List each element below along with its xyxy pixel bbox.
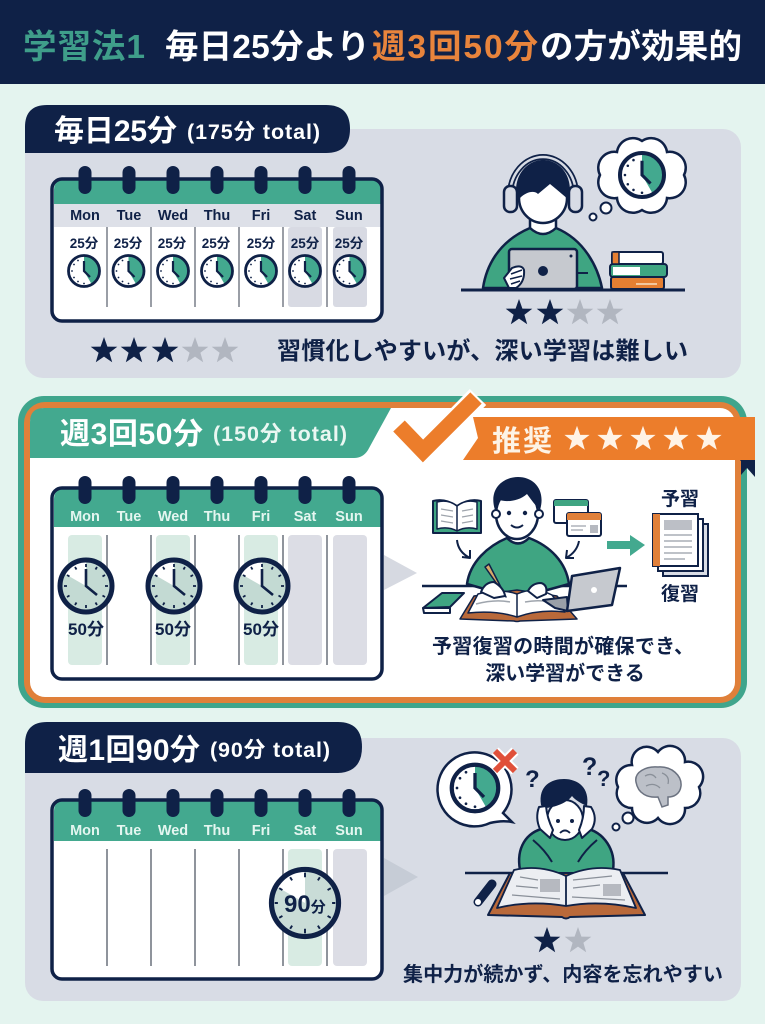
- calendar: seven days: 25分: [291, 236, 320, 251]
- heading: daily 25 minutes: (175分 total): [187, 120, 320, 144]
- badge: recommended ribbon: [463, 417, 755, 477]
- icon: question marks: ?: [525, 766, 540, 793]
- heading: once a week: (90分 total): [210, 738, 330, 762]
- calendar: seven days: Fri: [252, 208, 270, 224]
- title banner: [0, 0, 765, 84]
- illustration: student studying at desk: [422, 477, 627, 622]
- icon: thought bubble with brain: [612, 746, 703, 830]
- icon: question marks: ?: [597, 766, 610, 791]
- heading: three times a week: (150分 total): [213, 422, 347, 446]
- calendar: one long session: [52, 789, 382, 979]
- calendar: one long session: Sat: [294, 823, 316, 839]
- caption: recommended study: [432, 634, 694, 685]
- calendar: seven days: Mon: [70, 208, 100, 224]
- icon: question marks: [525, 753, 610, 793]
- caption: recommended study: 深い学習ができる: [485, 661, 645, 685]
- calendar: seven days: 25分: [114, 236, 143, 251]
- calendar: three study days: Thu: [204, 509, 230, 525]
- heading: daily 25 minutes: 毎日25分: [54, 115, 177, 148]
- calendar: three study days: 50分: [155, 620, 191, 639]
- rating: one of two stars: [534, 927, 591, 952]
- illustration: student with tablet and headphones: [461, 157, 685, 290]
- arrow: calendar to illustration: [384, 555, 417, 590]
- caption: daily study: 習慣化しやすいが、深い学習は難しい: [277, 337, 688, 365]
- calendar: one long session: Tue: [117, 823, 141, 839]
- icon: check mark: [398, 397, 478, 453]
- calendar: three study days: [52, 476, 382, 679]
- calendar: one long session: 90分: [284, 891, 326, 918]
- icon: question marks: ?: [582, 753, 597, 781]
- rating: three of five stars: [91, 337, 238, 362]
- calendar: seven days: 25分: [247, 236, 276, 251]
- calendar: three study days: Sun: [335, 509, 363, 525]
- calendar: one long session: Wed: [158, 823, 188, 839]
- icon: preview and review documents: [653, 488, 708, 605]
- calendar: three study days: 50分: [68, 620, 104, 639]
- title: main heading: の方が効果的: [540, 28, 742, 66]
- heading: daily 25 minutes: [25, 105, 350, 153]
- caption: recommended study: 予習復習の時間が確保でき、: [432, 634, 694, 658]
- title: main heading: 毎日25分より: [165, 29, 370, 66]
- icon: preview and review documents: 予習: [661, 488, 699, 510]
- icon: clock speech bubble with red cross: [438, 751, 515, 826]
- heading: once a week: 週1回90分: [58, 734, 200, 767]
- calendar: seven days: Tue: [117, 208, 141, 224]
- heading: once a week: [25, 722, 362, 773]
- calendar: seven days: [52, 166, 382, 321]
- calendar: three study days: Sat: [294, 509, 316, 525]
- heading: three times a week: [30, 408, 391, 458]
- calendar: seven days: Thu: [204, 208, 230, 224]
- calendar: one long session: Fri: [252, 823, 270, 839]
- calendar: one long session: Sun: [335, 823, 363, 839]
- calendar: seven days: 25分: [70, 236, 99, 251]
- calendar: seven days: Wed: [158, 208, 188, 224]
- illustration: worried student with open book: [465, 779, 668, 918]
- calendar: one long session: Mon: [70, 823, 100, 839]
- calendar: three study days: Tue: [117, 509, 141, 525]
- calendar: seven days: 25分: [202, 236, 231, 251]
- title: method label: 学習法1: [23, 29, 145, 66]
- calendar: seven days: Sat: [294, 208, 316, 224]
- calendar: seven days: 25分: [158, 236, 187, 251]
- rating: two of four stars: [506, 299, 623, 324]
- calendar: three study days: 50分: [243, 620, 279, 639]
- calendar: three study days: Wed: [158, 509, 188, 525]
- calendar: one long session: Thu: [204, 823, 230, 839]
- panel: daily 25 minutes: [25, 105, 741, 378]
- badge: recommended ribbon: 推奨: [492, 425, 552, 458]
- heading: three times a week: 週3回50分: [60, 418, 203, 451]
- caption: once a week: 集中力が続かず、内容を忘れやすい: [403, 962, 723, 986]
- title: main heading: 週3回50分: [372, 29, 538, 66]
- calendar: three study days: Mon: [70, 509, 100, 525]
- calendar: seven days: 25分: [335, 236, 364, 251]
- icon: preview and review documents: 復習: [661, 583, 699, 605]
- arrow: to study documents: [607, 535, 645, 556]
- panel: once a week: [25, 722, 741, 1001]
- calendar: seven days: Sun: [335, 208, 363, 224]
- panel: three times a week, recommended: [18, 396, 755, 708]
- arrow: calendar to illustration: [384, 858, 418, 896]
- calendar: three study days: Fri: [252, 509, 270, 525]
- icon: thought bubble with clock: [590, 138, 686, 220]
